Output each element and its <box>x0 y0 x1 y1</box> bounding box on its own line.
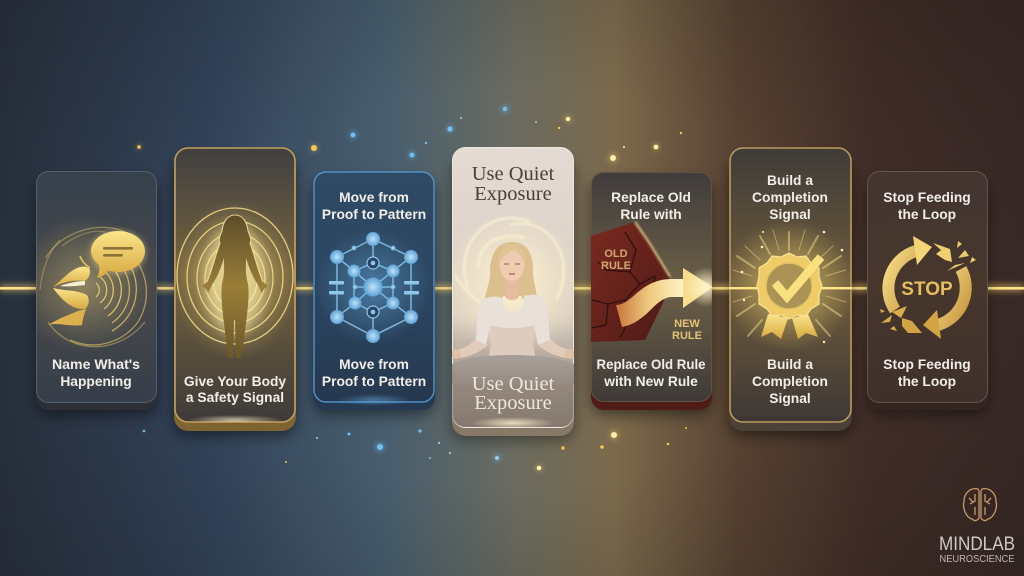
label: old rule: RULE <box>601 260 631 272</box>
card 1 label: Name What's <box>52 357 140 372</box>
icon: glowing body with rings <box>173 200 297 425</box>
card 6 bottom label: Completion <box>752 374 828 389</box>
card 2 label: Give Your Body <box>184 374 286 389</box>
card 5 bottom label: Replace Old Rule <box>596 357 706 372</box>
card 5: Replace Old Rule with New Rule <box>591 172 726 415</box>
icon: broken loop with stop <box>880 236 976 339</box>
card 4 top heading: Use Quiet <box>472 163 555 185</box>
glowing timeline line <box>0 284 1024 292</box>
card 1 label <box>52 357 140 389</box>
card 3 top heading <box>322 190 426 222</box>
illustration: meditating woman <box>452 216 574 427</box>
label: old rule: OLD <box>604 248 628 260</box>
card 3 top heading: Move from <box>339 190 409 205</box>
card 5 top heading <box>611 190 691 222</box>
card 4 bottom label: Use Quiet <box>472 373 555 395</box>
card 4: Use Quiet Exposure <box>440 148 584 440</box>
card 6 top heading: Build a <box>767 173 813 188</box>
card 6 top heading: Completion <box>752 190 828 205</box>
card 3 bottom label: Move from <box>339 357 409 372</box>
card 7 top heading: Stop Feeding <box>883 190 971 205</box>
logo: Mindlab Neuroscience <box>939 489 1015 565</box>
label: new rule: RULE <box>672 330 702 342</box>
card 7 top heading <box>883 190 971 222</box>
label: new rule: NEW <box>674 318 700 330</box>
card 1 label: Happening <box>60 374 132 389</box>
card 4 top heading: Exposure <box>474 183 552 205</box>
card 6 top heading <box>752 173 828 222</box>
card 4 bottom label <box>472 373 555 414</box>
label: old rule <box>601 248 631 272</box>
card 6 bottom label: Build a <box>767 357 813 372</box>
icon: badge with check and rays <box>729 226 852 346</box>
card 6 top heading: Signal <box>769 207 811 222</box>
particles <box>136 105 687 472</box>
card 4 bottom label: Exposure <box>474 392 552 414</box>
card 2: Give Your Body a Safety Signal <box>173 148 297 436</box>
card 6: Build a Completion Signal <box>723 148 855 436</box>
card 7 bottom label: Stop Feeding <box>883 357 971 372</box>
label: new rule <box>672 318 702 342</box>
icon: speaking lips with sound waves <box>36 225 148 348</box>
card 2 label: a Safety Signal <box>186 390 284 405</box>
card 3 bottom label: Proof to Pattern <box>322 374 426 389</box>
card 7 top heading: the Loop <box>898 207 956 222</box>
logo: Mindlab Neuroscience: NEUROSCIENCE <box>940 554 1015 565</box>
icon: brain <box>964 489 996 521</box>
icon: broken loop with stop: STOP <box>901 279 953 300</box>
card 5 bottom label: with New Rule <box>603 374 698 389</box>
card 3 bottom label <box>322 357 426 389</box>
card 2 label <box>184 374 286 405</box>
card 1: Name What's Happening <box>17 172 157 415</box>
card 5 bottom label <box>596 357 706 389</box>
illustration: old rule cracked wall <box>591 222 726 342</box>
card 6 bottom label <box>752 357 828 406</box>
logo: Mindlab Neuroscience: MINDLAB <box>939 533 1015 555</box>
card 5 top heading: Replace Old <box>611 190 691 205</box>
card 5 top heading: Rule with <box>620 207 682 222</box>
card 7: Stop Feeding the Loop <box>867 172 988 415</box>
icon: network of nodes <box>315 229 431 345</box>
card 3: Move from Proof to Pattern <box>313 172 435 415</box>
card 7 bottom label <box>883 357 971 389</box>
card 4 top heading <box>472 163 555 205</box>
icon: speech bubble <box>89 229 147 278</box>
card 7 bottom label: the Loop <box>898 374 956 389</box>
card 6 bottom label: Signal <box>769 391 811 406</box>
card 3 top heading: Proof to Pattern <box>322 207 426 222</box>
